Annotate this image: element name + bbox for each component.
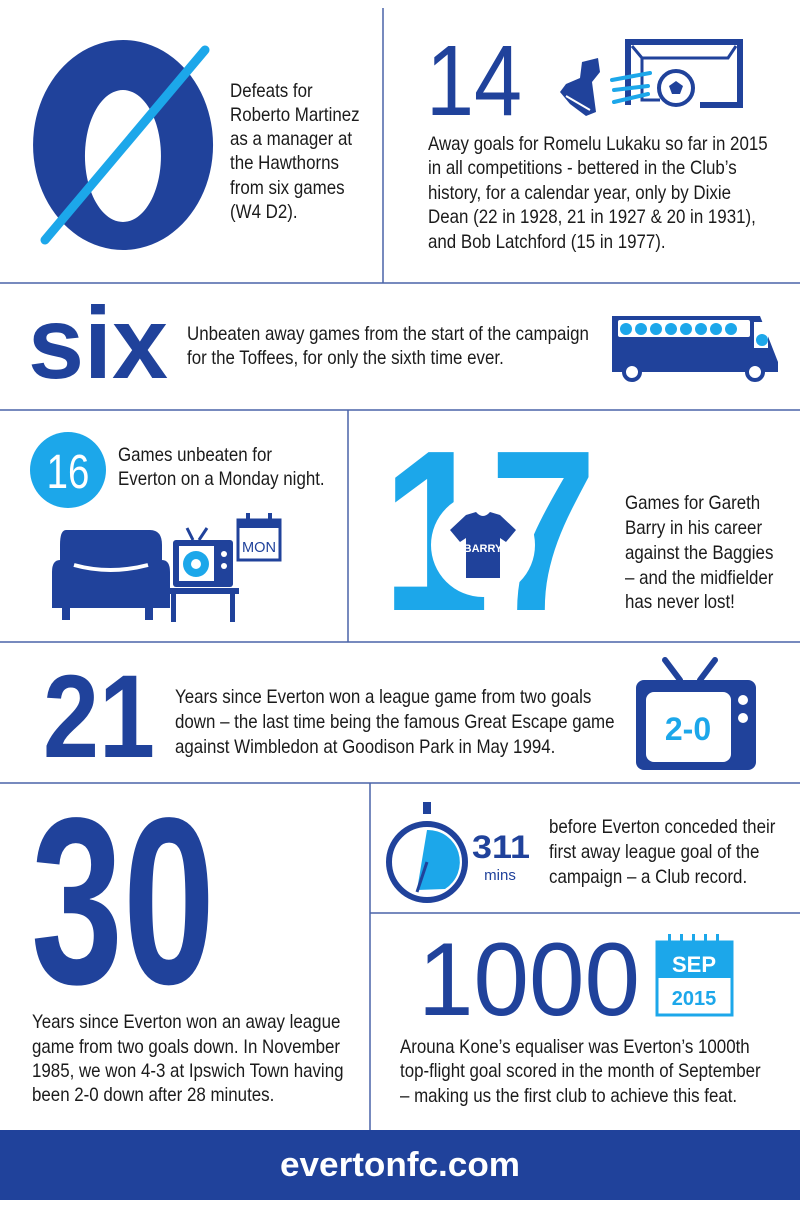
- text: zero defeats: from six games: [230, 177, 345, 198]
- text: zero defeats: as a manager at: [230, 128, 352, 149]
- icon: tv 2-0: [636, 660, 756, 770]
- footer: evertonfc.com: [280, 1146, 520, 1184]
- text: 14 away goals: [428, 133, 768, 252]
- icon: sofa, tv and calendar: [52, 513, 280, 622]
- text: zero defeats: the Hawthorns: [230, 152, 339, 173]
- text: 17 Barry: [625, 492, 773, 612]
- text: 16 Monday: Games unbeaten for: [118, 444, 272, 465]
- icon: calendar Sep 2015: SEP: [672, 952, 716, 977]
- text: zero defeats: [230, 80, 360, 222]
- text: 17 Barry: – and the midfielder: [625, 567, 773, 588]
- text: six unbeaten: Unbeaten away games from the start of the campaign: [187, 323, 589, 344]
- text: 17 Barry: Barry in his career: [625, 517, 762, 538]
- big zero with slash: [33, 40, 213, 250]
- text: 14 away goals: Dean (22 in 1928, 21 in 1927 & 20 in 1931),: [428, 206, 756, 227]
- big 17 with shirt: 17: [382, 402, 597, 659]
- text: zero defeats: (W4 D2).: [230, 201, 298, 222]
- text: 17 Barry: has never lost!: [625, 591, 735, 612]
- text: 1000 goals: [400, 1036, 761, 1106]
- text: 21 years: down – the last time being the famous Great Escape game: [175, 711, 615, 732]
- text: six unbeaten: [187, 323, 589, 368]
- text: 30 years: 1985, we won 4-3 at Ipswich Town having: [32, 1060, 343, 1081]
- text: 30 years: game from two goals down. In November: [32, 1036, 340, 1057]
- icon: calendar Sep 2015: [657, 934, 732, 1015]
- text: 1000 goals: top-flight goal scored in the month of September: [400, 1060, 761, 1081]
- number 14: 14: [426, 25, 522, 137]
- icon: boot kicking ball into goal: [560, 42, 740, 116]
- text: 311 mins: before Everton conceded their: [549, 816, 775, 837]
- text: 311 mins: [549, 816, 775, 887]
- text: 30 years: [32, 1011, 343, 1105]
- icon: stopwatch: [389, 802, 465, 900]
- text: 30 years: been 2-0 down after 28 minutes.: [32, 1084, 274, 1105]
- text: 14 away goals: history, for a calendar year, only by Dixie: [428, 182, 731, 203]
- stat 311 mins: 311: [472, 829, 530, 865]
- stat 311 mins: [472, 829, 530, 884]
- text: 14 away goals: and Bob Latchford (15 in 1977).: [428, 231, 666, 252]
- text: 311 mins: first away league goal of the: [549, 841, 759, 862]
- text: 17 Barry: against the Baggies: [625, 542, 773, 563]
- text: 30 years: Years since Everton won an away league: [32, 1011, 340, 1032]
- text: zero defeats: Roberto Martinez: [230, 104, 360, 125]
- text: 21 years: Years since Everton won a league game from two goals: [175, 686, 591, 707]
- big 17 with shirt: BARRY: [464, 543, 503, 555]
- text: 1000 goals: – making us the first club to achieve this feat.: [400, 1085, 737, 1106]
- badge 16: [30, 432, 106, 508]
- stat 311 mins: mins: [484, 867, 516, 884]
- text: 17 Barry: Games for Gareth: [625, 492, 760, 513]
- word six: six: [28, 286, 168, 400]
- number 21: 21: [43, 651, 155, 783]
- icon: sofa, tv and calendar: MON: [242, 539, 276, 556]
- footer: [0, 1130, 800, 1200]
- text: 21 years: [175, 686, 615, 757]
- text: 1000 goals: Arouna Kone’s equaliser was Everton’s 1000th: [400, 1036, 750, 1057]
- text: 311 mins: campaign – a Club record.: [549, 866, 747, 887]
- text: 16 Monday: [118, 444, 325, 489]
- number 30: 30: [31, 768, 215, 1034]
- number 1000: 1000: [418, 922, 640, 1038]
- icon: bus: [612, 316, 778, 380]
- text: six unbeaten: for the Toffees, for only the sixth time ever.: [187, 347, 504, 368]
- text: zero defeats: Defeats for: [230, 80, 313, 101]
- text: 16 Monday: Everton on a Monday night.: [118, 468, 325, 489]
- text: 14 away goals: in all competitions - bettered in the Club’s: [428, 157, 737, 178]
- icon: tv 2-0: 2-0: [665, 711, 711, 747]
- text: 21 years: against Wimbledon at Goodison Park in May 1994.: [175, 736, 555, 757]
- text: 14 away goals: Away goals for Romelu Lukaku so far in 2015: [428, 133, 768, 154]
- badge 16: 16: [47, 446, 89, 499]
- icon: calendar Sep 2015: 2015: [672, 988, 716, 1010]
